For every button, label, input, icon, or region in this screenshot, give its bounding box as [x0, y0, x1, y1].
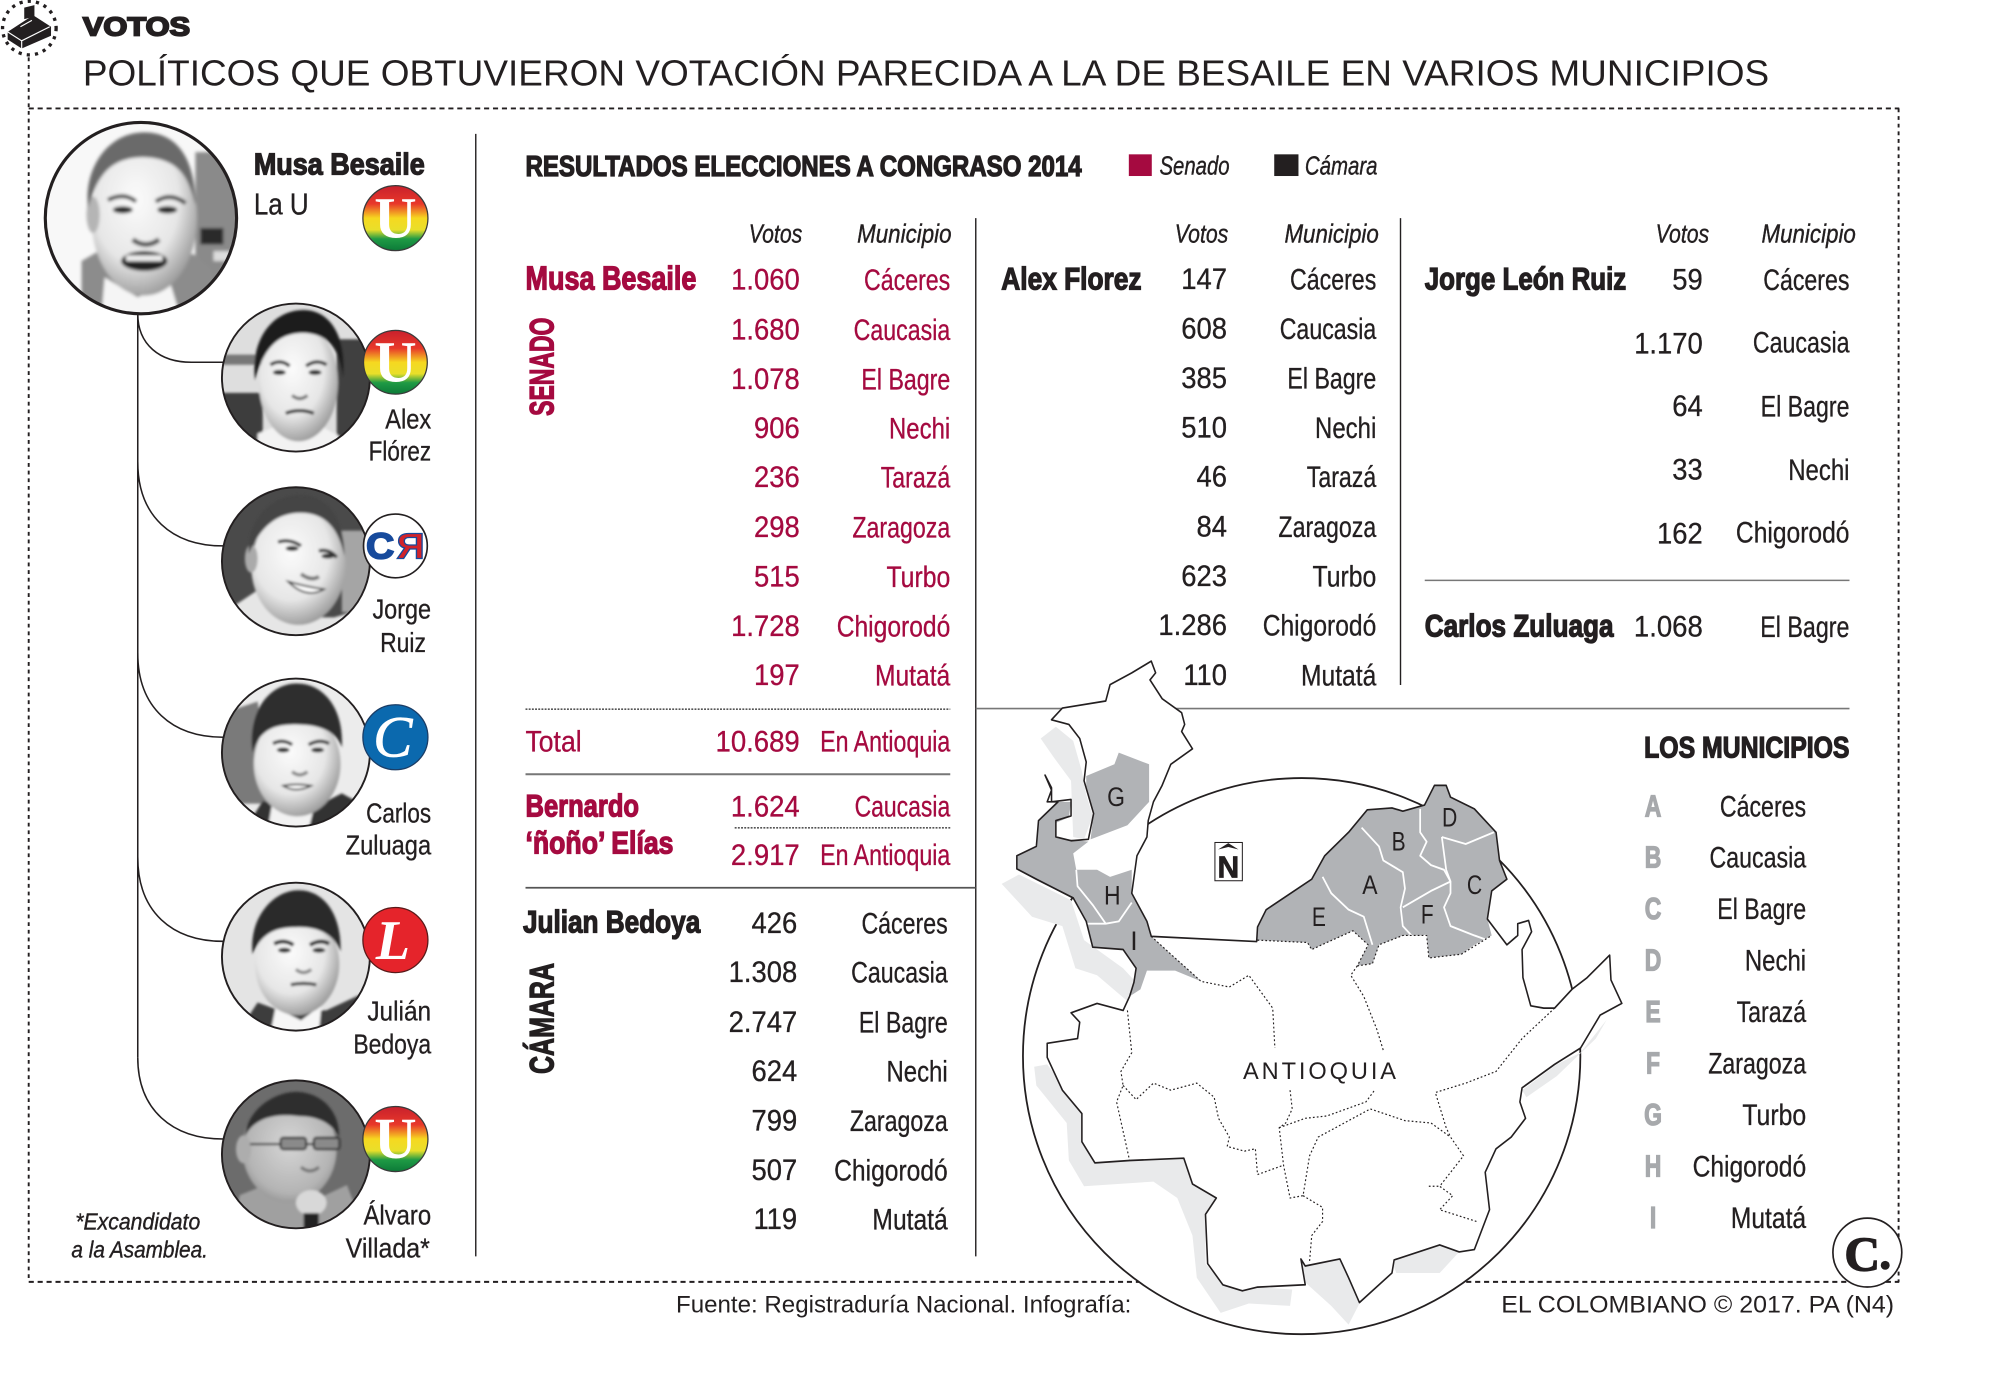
map letters: C: [1467, 870, 1482, 900]
votes: Musa Besaile: 1.680: [731, 313, 800, 347]
name: Alex Florez: Alex Florez: [1001, 261, 1142, 297]
total row: Total: [526, 725, 582, 758]
name: Julian Bedoya: Julian Bedoya: [523, 903, 700, 939]
candidate names: Álvaro: [364, 1199, 431, 1230]
votes: Julian Bedoya: 426: [751, 907, 797, 940]
name: Musa Besaile Senado: Musa Besaile: [526, 261, 696, 298]
badge: Cambio Radical: [364, 514, 427, 578]
name: Jorge León Ruiz: Jorge León Ruiz: [1425, 261, 1626, 297]
municipalities: Musa Besaile: Turbo: [886, 561, 950, 594]
column headers: Municipio: [1284, 220, 1379, 248]
municipalities: Alex Florez: Zaragoza: [1278, 510, 1377, 544]
key: letters: C: [1645, 892, 1661, 926]
key: municipalities: El Bagre: [1717, 892, 1806, 926]
map letters: I: [1130, 926, 1138, 956]
municipalities: Alex Florez: [1263, 263, 1377, 692]
key: municipalities: Nechi: [1745, 944, 1806, 977]
total row: En Antioquia: [820, 725, 951, 758]
badge: Partido Conservador: C: [373, 704, 413, 769]
candidate names: Villada*: [346, 1233, 430, 1264]
votes: Carlos Zuluaga: 1.068: [1634, 610, 1703, 643]
label: CÁMARA: CÁMARA: [522, 963, 562, 1074]
table rules: [526, 580, 1849, 888]
key: letters: E: [1645, 995, 1661, 1029]
votes: Musa Besaile: 298: [754, 511, 800, 544]
badge: Cambio Radical: Я: [397, 527, 425, 567]
votes: Alex Florez: 623: [1181, 560, 1227, 593]
photo: Carlos Zuluaga: [219, 676, 372, 829]
votes: Julian Bedoya: 507: [751, 1154, 797, 1187]
candidate names: Ruiz: [380, 627, 426, 658]
badge: La U party main: U: [374, 185, 417, 250]
municipalities: Alex Florez: Caucasia: [1280, 313, 1377, 346]
municipalities: Julian Bedoya: Chigorodó: [834, 1154, 948, 1187]
municipalities: Alex Florez: Mutatá: [1301, 659, 1377, 692]
name: Bernardo Elías: ‘ñoño’ Elías: [526, 824, 673, 860]
key: letters: I: [1650, 1201, 1656, 1235]
municipalities: Musa Besaile: [837, 263, 951, 692]
column headers: Municipio: [857, 220, 952, 248]
candidate names: Zuluaga: [346, 830, 431, 861]
votes: Julian Bedoya: 2.747: [729, 1006, 797, 1039]
key: letters: B: [1645, 841, 1661, 875]
key: municipalities: Caucasia: [1710, 841, 1806, 874]
votes: Musa Besaile: 197: [754, 659, 800, 692]
column headers: [749, 220, 1856, 248]
key: letters: G: [1644, 1098, 1662, 1132]
photo: Julián Bedoya: [219, 880, 372, 1033]
municipalities: Musa Besaile: Mutatá: [875, 659, 951, 692]
badge: Partido Conservador: [363, 704, 428, 770]
credit: EL COLOMBIANO © 2017. PA (N4): [1501, 1291, 1894, 1317]
logo: El Colombiano: C: [1844, 1228, 1880, 1281]
municipalities: Alex Florez: Chigorodó: [1263, 609, 1376, 642]
municipalities: Musa Besaile: Chigorodó: [837, 610, 950, 643]
votes: Jorge León Ruiz: 59: [1672, 263, 1703, 297]
legend: Senado: Senado: [1159, 153, 1230, 181]
municipalities: Alex Florez: Nechi: [1315, 411, 1376, 445]
map: Antioquia: [1002, 661, 1622, 1334]
municipalities: Musa Besaile: Tarazá: [881, 461, 951, 494]
votes: Jorge León Ruiz: 1.170: [1634, 327, 1703, 361]
photo: Álvaro Villada: [219, 1078, 372, 1231]
map letters: F: [1421, 899, 1434, 929]
logo: El Colombiano: [1833, 1218, 1902, 1287]
votes: Bernardo Elías: [731, 790, 951, 872]
municipalities: Jorge León Ruiz: El Bagre: [1761, 390, 1849, 423]
votes: Alex Florez: 110: [1183, 659, 1227, 692]
votes: Julian Bedoya: [729, 907, 797, 1236]
votes: Musa Besaile: [731, 263, 800, 692]
votes: Julian Bedoya: 799: [751, 1105, 797, 1138]
votes: Alex Florez: 46: [1197, 461, 1227, 494]
votes: Bernardo Elías: 2.917: [731, 839, 800, 872]
badge: Cambio Radical: C: [366, 527, 394, 567]
key: municipalities: Cáceres: [1720, 790, 1806, 823]
key: letters: D: [1645, 944, 1661, 977]
votes: Alex Florez: 1.286: [1158, 609, 1227, 643]
candidate names: Julián: [367, 995, 431, 1026]
municipalities: Alex Florez: El Bagre: [1287, 362, 1376, 395]
column headers: Votos: [1656, 220, 1709, 248]
map letters: G: [1107, 782, 1125, 812]
map letters: D: [1442, 803, 1457, 833]
footnote: [71, 1209, 208, 1263]
candidate names: Carlos: [366, 798, 431, 829]
municipalities: Julian Bedoya: Nechi: [886, 1055, 948, 1088]
map letters: H: [1104, 880, 1121, 910]
votes: Jorge León Ruiz: [1634, 263, 1703, 551]
key: municipalities: [1693, 790, 1806, 1234]
badge: Partido Liberal: [363, 908, 428, 973]
name: Bernardo Elías: Bernardo: [526, 787, 639, 823]
municipalities: Julian Bedoya: Caucasia: [851, 956, 948, 989]
votes: Bernardo Elías: Caucasia: [855, 790, 951, 823]
column headers: Votos: [1175, 220, 1229, 248]
badge: Partido Liberal: L: [375, 910, 410, 972]
key: municipalities: Mutatá: [1731, 1201, 1806, 1234]
municipalities: Jorge León Ruiz: Chigorodó: [1736, 516, 1849, 549]
municipalities: Jorge León Ruiz: Cáceres: [1763, 263, 1849, 297]
badge: La U party Alex: [364, 329, 427, 394]
municipalities: Julian Bedoya: Mutatá: [872, 1203, 948, 1236]
municipalities: Musa Besaile: El Bagre: [861, 363, 950, 396]
votes: Musa Besaile: 1.060: [731, 263, 800, 297]
party: La U: La U: [254, 187, 309, 221]
votes: Musa Besaile: 906: [754, 412, 800, 445]
heading: results: RESULTADOS ELECCIONES A CONGRASO 2014: [526, 151, 1082, 183]
map circle: [1023, 778, 1580, 1334]
legend: Cámara: Cámara: [1305, 153, 1378, 181]
column headers: Votos: [749, 220, 802, 248]
badge: La U party Álvaro: U: [374, 1106, 417, 1171]
badge: La U party Alex: U: [374, 329, 417, 394]
municipalities: Jorge León Ruiz: Nechi: [1788, 453, 1849, 487]
candidate names: Jorge: [372, 594, 431, 625]
votes: Alex Florez: 385: [1181, 362, 1227, 395]
votes: Alex Florez: 510: [1181, 411, 1227, 445]
municipalities: Musa Besaile: Caucasia: [854, 313, 951, 346]
candidate names: Flórez: [369, 435, 431, 466]
municipalities: Musa Besaile: Zaragoza: [852, 511, 951, 544]
municipalities: Alex Florez: Turbo: [1312, 560, 1376, 593]
municipalities: Jorge León Ruiz: Caucasia: [1753, 326, 1850, 359]
footnote: *Excandidato: [75, 1209, 200, 1235]
badge: La U party Álvaro: [363, 1106, 428, 1172]
key: municipalities: Chigorodó: [1693, 1150, 1806, 1183]
name: Carlos Zuluaga: Carlos Zuluaga: [1425, 607, 1614, 643]
total row: 10.689: [716, 725, 800, 758]
municipalities: Alex Florez: Cáceres: [1290, 263, 1376, 296]
municipalities: Alex Florez: Tarazá: [1307, 460, 1377, 494]
municipalities: Julian Bedoya: El Bagre: [859, 1006, 948, 1039]
column dividers: [476, 134, 1401, 1256]
votes: Musa Besaile: 515: [754, 561, 800, 594]
badge: La U party main: [363, 185, 428, 251]
map shapes: [1002, 661, 1622, 1325]
photo: Alex Flórez: [219, 301, 375, 457]
votes: Julian Bedoya: 1.308: [729, 956, 797, 989]
legend: Senado: [1129, 153, 1230, 181]
title: POLÍTICOS QUE OBTUVIERON VOTACIÓN PARECIDA A LA DE BESAILE EN VARIOS MUNICIPIOS: [83, 53, 1769, 93]
municipality: Carlos Zuluaga: El Bagre: [1760, 611, 1849, 644]
votes: Alex Florez: [1158, 263, 1227, 692]
connector lines: [138, 314, 223, 1139]
map letters: [1104, 782, 1482, 956]
candidate names: Bedoya: [353, 1029, 431, 1060]
candidate names: Alex: [385, 404, 431, 435]
heading: VOTOS: VOTOS: [83, 14, 190, 42]
votes: Musa Besaile: 1.728: [731, 610, 800, 643]
photo: Jorge Ruiz: [219, 485, 372, 638]
votes: Bernardo Elías: En Antioquia: [820, 839, 951, 872]
map letters: A: [1362, 870, 1378, 900]
icon: north compass: [1215, 842, 1242, 885]
votes: Musa Besaile: 1.078: [731, 363, 800, 396]
source note: Fuente: Registraduría Nacional. Infografía:: [676, 1291, 1131, 1317]
map letters: B: [1392, 827, 1406, 857]
icon: north compass: N: [1217, 851, 1239, 885]
label: SENADO: SENADO: [524, 318, 562, 416]
map letters: E: [1312, 902, 1326, 932]
photo: Musa Besaile: [42, 119, 245, 317]
municipalities: Julian Bedoya: Zaragoza: [850, 1105, 948, 1138]
votes: Alex Florez: 608: [1181, 313, 1227, 346]
candidate names: [346, 404, 431, 1264]
municipalities: Musa Besaile: Nechi: [889, 412, 950, 445]
key: letters: H: [1645, 1149, 1661, 1183]
key: municipalities: Tarazá: [1737, 995, 1806, 1029]
name: Bernardo Elías: [526, 787, 673, 860]
icon: ballot box: [3, 1, 56, 55]
votes: Jorge León Ruiz: 162: [1657, 517, 1703, 551]
map label: Antioquia: ANTIOQUIA: [1243, 1058, 1396, 1084]
municipalities: Musa Besaile: Cáceres: [864, 263, 950, 297]
heading: municipalities: LOS MUNICIPIOS: [1644, 732, 1849, 765]
key: municipalities: Turbo: [1742, 1098, 1806, 1132]
votes: Alex Florez: 147: [1181, 263, 1227, 296]
votes: Jorge León Ruiz: 64: [1672, 390, 1703, 423]
votes: Alex Florez: 84: [1197, 510, 1227, 544]
name: Musa Besaile: Musa Besaile: [254, 148, 425, 182]
municipalities: Jorge León Ruiz: [1736, 263, 1850, 549]
key: letters: [1644, 789, 1662, 1235]
column headers: Municipio: [1761, 220, 1856, 248]
votes: Jorge León Ruiz: 33: [1672, 454, 1703, 487]
key: municipalities: Zaragoza: [1708, 1047, 1806, 1080]
legend: Cámara: [1274, 153, 1378, 181]
votes: Bernardo Elías: 1.624: [731, 790, 800, 823]
total row: [526, 725, 951, 758]
municipalities: Julian Bedoya: [834, 907, 948, 1236]
votes: Musa Besaile: 236: [754, 461, 800, 495]
municipalities: Julian Bedoya: Cáceres: [861, 907, 948, 940]
footnote: a la Asamblea.: [71, 1237, 208, 1263]
votes: Julian Bedoya: 119: [753, 1203, 797, 1236]
key: letters: A: [1645, 789, 1661, 823]
votes: Julian Bedoya: 624: [751, 1055, 797, 1088]
key: letters: F: [1646, 1046, 1660, 1080]
